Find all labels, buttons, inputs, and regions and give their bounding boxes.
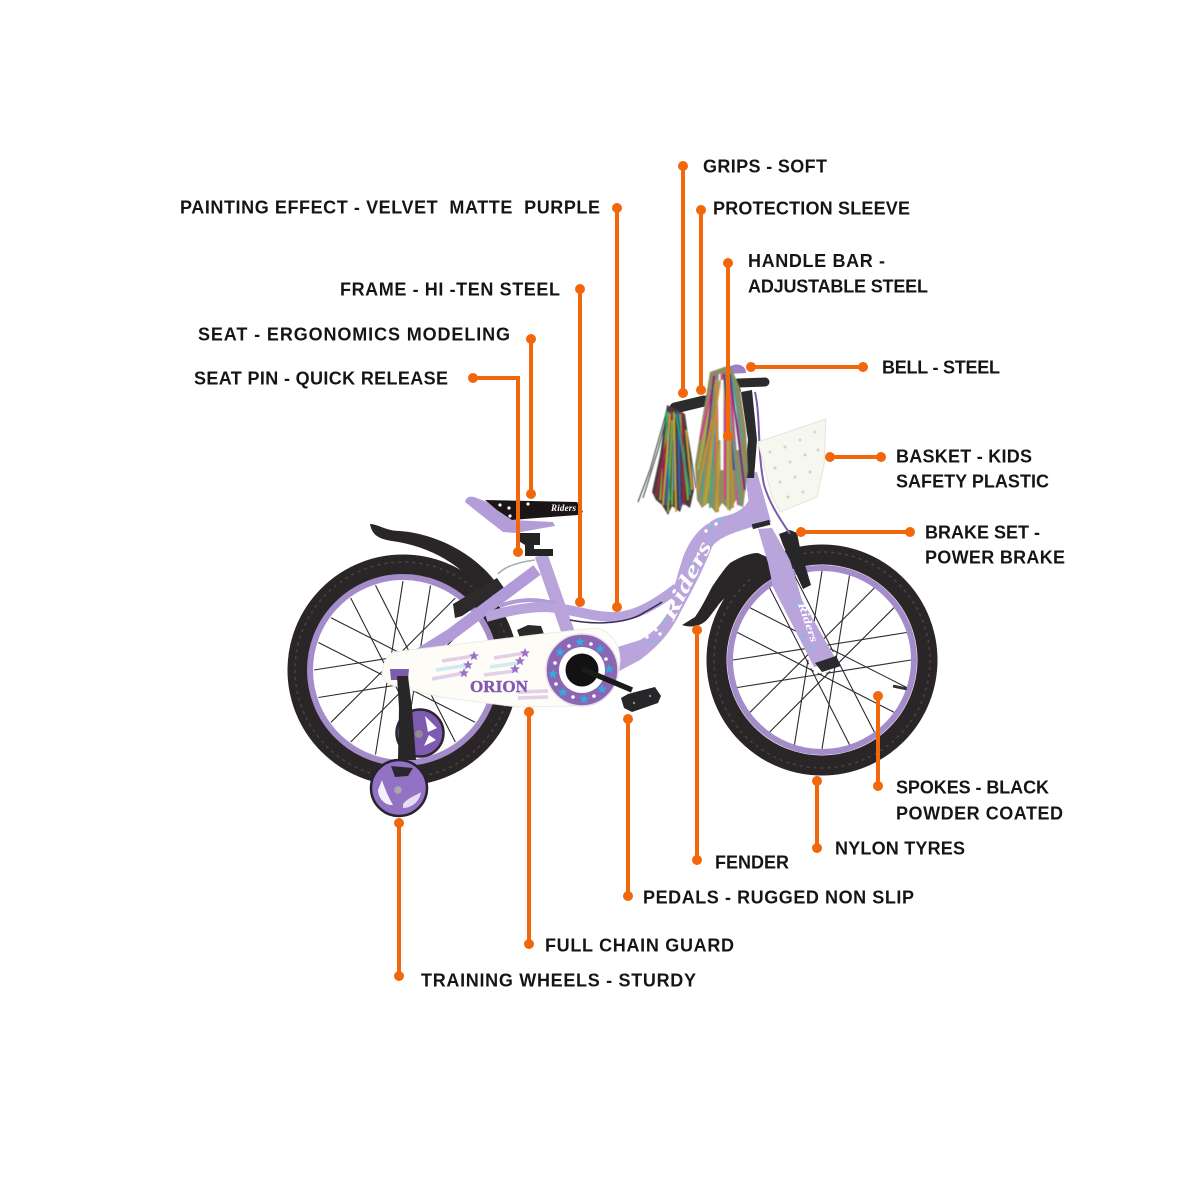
stem and brake cable — [741, 390, 790, 534]
front brake — [779, 530, 811, 589]
callout: brake set: POWER BRAKE — [925, 548, 1065, 568]
front wheel — [708, 546, 936, 774]
head tube — [745, 472, 771, 528]
rear wheel — [290, 556, 516, 784]
callout: brake set: BRAKE SET - — [925, 522, 1040, 542]
callout: brake set — [796, 522, 1065, 568]
handlebar grips and bell — [675, 364, 765, 408]
seat top — [485, 500, 583, 520]
callout: full chain guard: FULL CHAIN GUARD — [545, 936, 734, 956]
callout: seat: SEAT - ERGONOMICS MODELING — [198, 324, 510, 344]
frame decals — [649, 519, 722, 643]
decal text: frame: Riders — [655, 537, 716, 626]
tassel: left — [638, 405, 696, 515]
callout: nylon tyres: NYLON TYRES — [835, 838, 965, 858]
rear pedal — [517, 625, 544, 638]
bicycle illustration — [290, 364, 936, 816]
chain guard — [382, 628, 620, 707]
chainring badge — [546, 634, 618, 706]
rear fender — [370, 524, 501, 598]
callout: spokes — [873, 691, 1063, 824]
decal text: fork: Riders — [795, 600, 820, 644]
callout: basket — [825, 446, 1049, 492]
callout: protection sleeve — [696, 198, 910, 395]
callout: handle bar: ADJUSTABLE STEEL — [748, 276, 928, 296]
callout: basket: BASKET - KIDS — [896, 446, 1032, 466]
callout: handle bar — [723, 251, 928, 441]
stripes — [432, 653, 548, 698]
back training wheel — [396, 710, 444, 756]
callout: handle bar: HANDLE BAR - — [748, 251, 885, 271]
callout: pedals: PEDALS - RUGGED NON SLIP — [643, 888, 914, 908]
callout: fender — [692, 625, 789, 872]
seat post — [517, 533, 540, 553]
seat tube — [541, 555, 568, 632]
seat underside — [465, 497, 555, 533]
bell — [727, 364, 746, 374]
callout: protection sleeve: PROTECTION SLEEVE — [713, 198, 910, 218]
top tube — [486, 588, 677, 617]
callout: full chain guard — [524, 707, 734, 956]
callout: frame: FRAME - HI -TEN STEEL — [340, 280, 560, 300]
callout: seat pin — [194, 368, 523, 557]
chain guard logo: ORION — [470, 677, 529, 696]
arc tube — [500, 600, 556, 606]
callout: training wheels: TRAINING WHEELS - STURDY — [421, 970, 696, 990]
fork — [752, 520, 841, 672]
decal text: seat: Riders — [550, 503, 576, 513]
front fender — [682, 553, 773, 626]
tassel: right — [695, 365, 748, 513]
seat stay — [418, 570, 537, 655]
callout: spokes: SPOKES - BLACK — [896, 778, 1049, 798]
basket — [758, 419, 826, 512]
training wheel arm — [390, 669, 416, 760]
rear brake — [453, 560, 535, 618]
callout: painting effect: PAINTING EFFECT - VELVET MATTE PURPLE — [180, 198, 600, 218]
callout: seat — [198, 324, 536, 499]
front training wheel — [371, 760, 427, 816]
down tube — [608, 497, 768, 676]
seat — [465, 497, 583, 556]
callout: pedals — [623, 714, 914, 908]
callout: bell — [746, 358, 1000, 378]
callout: grips — [678, 156, 827, 398]
callout: spokes: POWDER COATED — [896, 804, 1063, 824]
callout: basket: SAFETY PLASTIC — [896, 472, 1049, 492]
callout: bell: BELL - STEEL — [882, 358, 1000, 378]
callout: seat pin: SEAT PIN - QUICK RELEASE — [194, 368, 448, 388]
callout: frame — [340, 280, 585, 607]
frame — [418, 472, 771, 676]
callout: training wheels — [394, 818, 696, 990]
callout: painting effect — [180, 198, 622, 612]
callout: nylon tyres — [812, 776, 965, 858]
seat clamp — [525, 549, 553, 556]
callout: grips: GRIPS - SOFT — [703, 156, 827, 176]
callout: fender: FENDER — [715, 852, 789, 872]
crank and pedal — [582, 669, 661, 712]
